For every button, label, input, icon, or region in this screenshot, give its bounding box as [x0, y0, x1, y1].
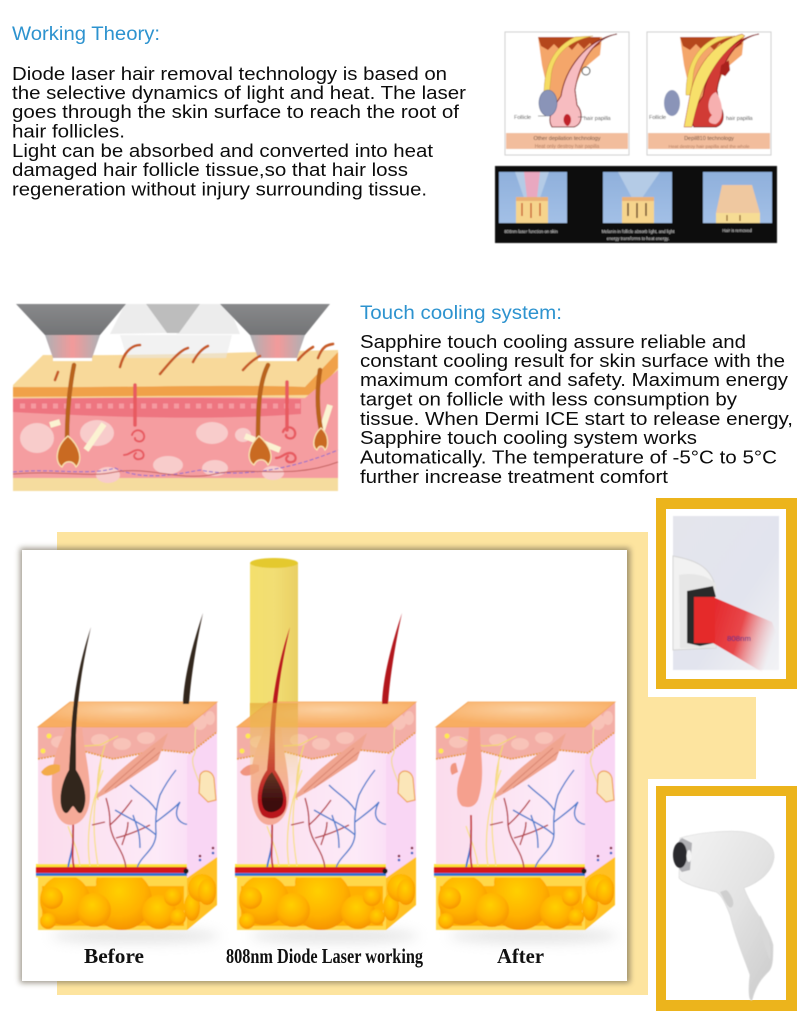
diagram: depil810 technology: Follicle [649, 115, 666, 121]
block: after [434, 702, 618, 943]
text block: touch cooling description: Sapphire touch cooling system works [360, 427, 697, 448]
block: 808nm laser working [235, 613, 419, 943]
stage 2 tile [603, 172, 672, 223]
panel: before, working, after comparison [22, 550, 627, 981]
background: pale yellow panel [57, 532, 756, 995]
stage captions: Melanin in follicle absorb light, and light [602, 229, 675, 234]
text block: touch cooling description: tissue. When Dermi ICE start to release energy, [360, 408, 793, 429]
text block: touch cooling description: Sapphire touch cooling assure reliable and [360, 331, 746, 352]
block: before [36, 613, 220, 943]
right handpiece [220, 304, 330, 361]
faded middle handpiece [110, 304, 240, 358]
text block: working theory description: Light can be absorbed and converted into heat [12, 140, 434, 161]
caption: after: After [497, 944, 544, 968]
shadow of white panel [20, 548, 630, 983]
diagram: depil810 technology [647, 32, 771, 155]
hair follicles [55, 344, 333, 462]
panel: three laser stages [495, 166, 777, 243]
text block: touch cooling description: constant cooling result for skin surface with the [360, 350, 785, 371]
stage 1 tile [499, 172, 567, 223]
frame: 808nm laser window photo [656, 498, 797, 689]
diagram: other depilation technology: Other depilation technology [534, 136, 601, 142]
diagram: other depilation technology: hair papilla [584, 116, 612, 122]
text block: working theory description: hair follicles. [12, 120, 125, 142]
text block: working theory description: Diode laser hair removal technology is based on [12, 63, 447, 84]
stage 3 tile [703, 172, 772, 223]
stage captions: energy transforms to heat energy. [607, 236, 669, 241]
text block: touch cooling description: further increase treatment comfort [360, 466, 669, 487]
diagram: depil810 technology: Heat destroy hair papilla and the whole [668, 144, 750, 149]
diagram: other depilation technology: Follicle [514, 115, 531, 121]
caption: working: 808nm Diode Laser working [226, 944, 423, 968]
diagram: other depilation technology: Heat only destroy hair papilla [535, 144, 599, 150]
illustration: sapphire touch cooling on skin [13, 304, 338, 491]
stage captions: 808nm laser function on skin [504, 229, 558, 234]
text block: touch cooling description: target on follicle with less consumption by [360, 388, 738, 410]
frame: handpiece photo [656, 786, 797, 1011]
diagram: depil810 technology: Depil810 technology [684, 136, 734, 142]
heading: working theory: Working Theory: [12, 23, 160, 45]
diagram: depil810 technology: hair papilla [726, 116, 754, 122]
text block: touch cooling description [360, 331, 793, 487]
text block: working theory description: damaged hair follicle tissue,so that hair loss [12, 159, 408, 180]
heading: touch cooling system: Touch cooling system: [360, 302, 562, 324]
laser beam [250, 558, 298, 718]
text block: working theory description: regeneration without injury surrounding tissue. [12, 178, 427, 200]
left handpiece [16, 304, 126, 361]
stage captions: Hair is removed [722, 228, 752, 233]
caption: before: Before [84, 944, 144, 968]
diagram: other depilation technology [505, 32, 629, 155]
text block: touch cooling description: Automatically. The temperature of -5°C to 5°C [360, 446, 777, 468]
text block: working theory description [12, 63, 466, 200]
text block: working theory description: goes through the skin surface to reach the root of [12, 101, 460, 122]
laser overlay inside skin [250, 703, 298, 803]
stage captions [504, 228, 752, 241]
text block: working theory description: the selective dynamics of light and heat. The laser [12, 82, 466, 103]
frame: 808nm laser window photo: 808nm [727, 636, 751, 643]
text block: touch cooling description: maximum comfort and safety. Maximum energy [360, 369, 789, 390]
